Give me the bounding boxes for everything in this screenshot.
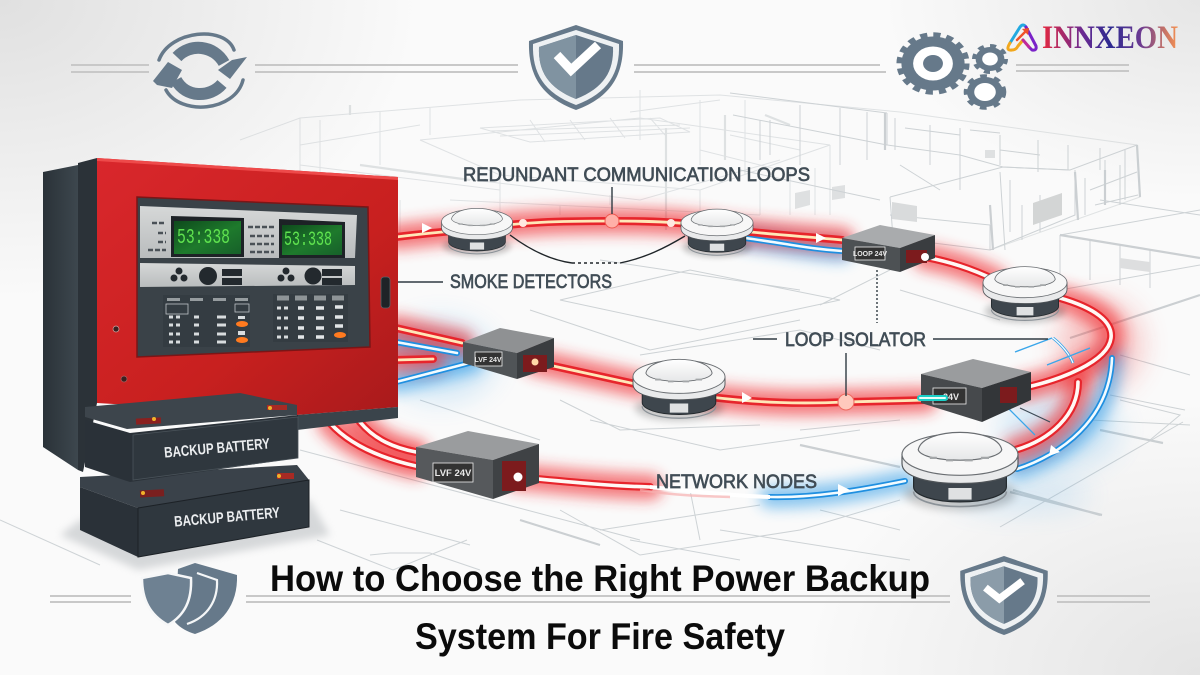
panel: left side cabinet (43, 165, 78, 470)
network node 3: 24V (943, 392, 959, 402)
fire alarm control panel (43, 158, 398, 472)
icon: shield with check (529, 25, 623, 110)
left keypad (163, 295, 250, 347)
logo: innxeon: INNXEON (1042, 20, 1178, 56)
control strip 1 (170, 267, 242, 285)
bottom divider lines (50, 596, 1150, 602)
upper backup battery: BACKUP BATTERY (164, 435, 271, 462)
icon: shield with check, lower right (960, 556, 1048, 635)
display 1: 53:338 (177, 227, 230, 250)
label: redundant communication loops: REDUNDANT COMMUNICATION LOOPS (463, 165, 810, 186)
title: System For Fire Safety (415, 616, 785, 657)
callout connectors (398, 187, 1048, 396)
building floor plan sketch (0, 90, 1200, 570)
panel: inner window (137, 197, 370, 357)
label: network nodes: NETWORK NODES (656, 472, 817, 493)
title (270, 558, 930, 657)
smoke detector 2 (681, 209, 753, 257)
icon: refresh arrows (153, 34, 247, 107)
control strip 2 (278, 268, 342, 285)
right keypad (273, 294, 348, 342)
display 2: 53:338 (284, 229, 332, 252)
status labels (148, 223, 274, 252)
network node 3 (920, 359, 1031, 422)
display 1 (171, 216, 244, 257)
icon: gears (900, 36, 1006, 108)
screws (113, 326, 119, 332)
door handle (381, 277, 390, 308)
lower backup battery (80, 465, 309, 557)
smoke detector 3 (983, 267, 1067, 323)
title: How to Choose the Right Power Backup (270, 558, 930, 599)
top divider lines (71, 65, 1129, 72)
icon: double shield (142, 563, 237, 634)
display 2 (279, 219, 345, 258)
upper backup battery (85, 393, 298, 482)
panel: red door (97, 158, 398, 415)
network node 2: LVF 24V (474, 357, 502, 364)
smoke detector 1 (442, 208, 512, 256)
network node 1: LOOP 24V (853, 251, 887, 258)
lower backup battery: BACKUP BATTERY (174, 504, 281, 531)
network node 4 (416, 431, 539, 499)
glow wash around loop (385, 300, 1142, 511)
communication loop cables (330, 214, 1112, 497)
network node 2 (463, 328, 554, 379)
network node 1 (842, 225, 935, 272)
label: loop isolator: LOOP ISOLATOR (785, 330, 926, 351)
battery shadow (60, 500, 330, 570)
smoke detector 5 large (902, 432, 1018, 510)
label: smoke detectors: SMOKE DETECTORS (450, 272, 612, 293)
network node 4: LVF 24V (435, 468, 472, 479)
smoke detector 4 (633, 359, 725, 421)
